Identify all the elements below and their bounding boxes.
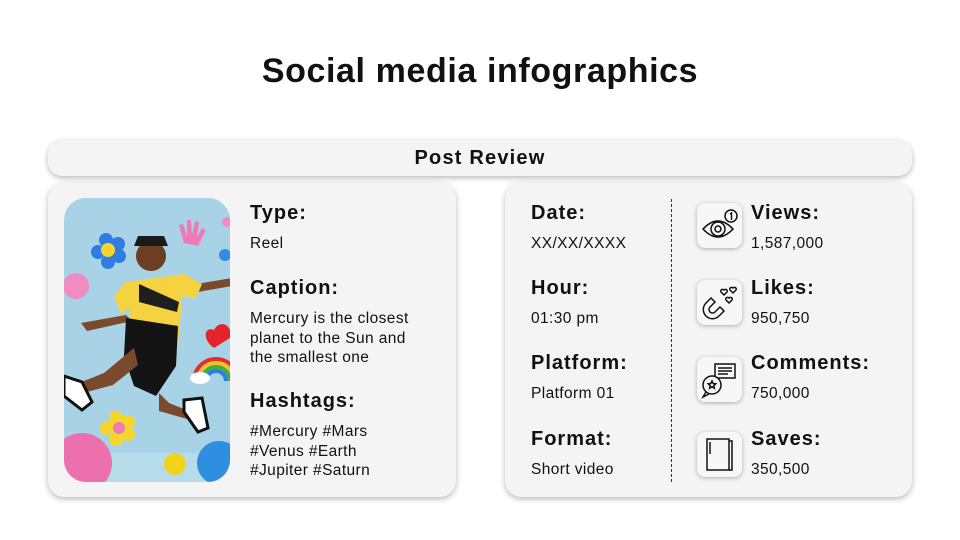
text: #Mercury #Mars: [250, 423, 368, 440]
icon: views eye: [697, 203, 742, 248]
text: 01:30 pm: [531, 310, 599, 327]
text: Hour: Hour:: [531, 277, 589, 299]
text: the smallest one: [250, 349, 369, 366]
header bar: Post Review: [48, 140, 912, 176]
text: Mercury is the closest: [250, 310, 409, 327]
text: Platform 01: [531, 385, 615, 402]
text: Date: Date:: [531, 202, 586, 224]
text: Saves: Saves:: [751, 428, 822, 450]
icon: comments: [697, 357, 742, 402]
text: Type: Type:: [250, 202, 307, 224]
text: planet to the Sun and: [250, 330, 406, 346]
text: XX/XX/XXXX: [531, 235, 626, 252]
header bar: Post Review: Post Review: [414, 147, 546, 169]
icon: saves book: [697, 432, 742, 477]
icon: likes magnet: [697, 280, 742, 325]
title: Social media infographics: [262, 52, 698, 90]
text: Format: Format:: [531, 428, 612, 450]
text: Platform: Platform:: [531, 352, 628, 374]
text: Views: Views:: [751, 202, 820, 224]
text: 1,587,000: [751, 235, 824, 252]
text: 750,000: [751, 385, 810, 402]
text: Caption: Caption:: [250, 277, 339, 299]
text: #Jupiter #Saturn: [250, 462, 370, 479]
text: Likes: Likes:: [751, 277, 815, 299]
text: Hashtags: Hashtags:: [250, 390, 356, 412]
photo: jumping person: [64, 198, 230, 482]
text: 350,500: [751, 461, 810, 478]
text: Reel: [250, 235, 283, 252]
text: 950,750: [751, 310, 810, 327]
text: #Venus #Earth: [250, 442, 357, 460]
text: Short video: [531, 461, 614, 478]
panel: stats: [505, 183, 912, 497]
panel: post content: [48, 183, 456, 497]
text: Comments: Comments:: [751, 352, 870, 374]
